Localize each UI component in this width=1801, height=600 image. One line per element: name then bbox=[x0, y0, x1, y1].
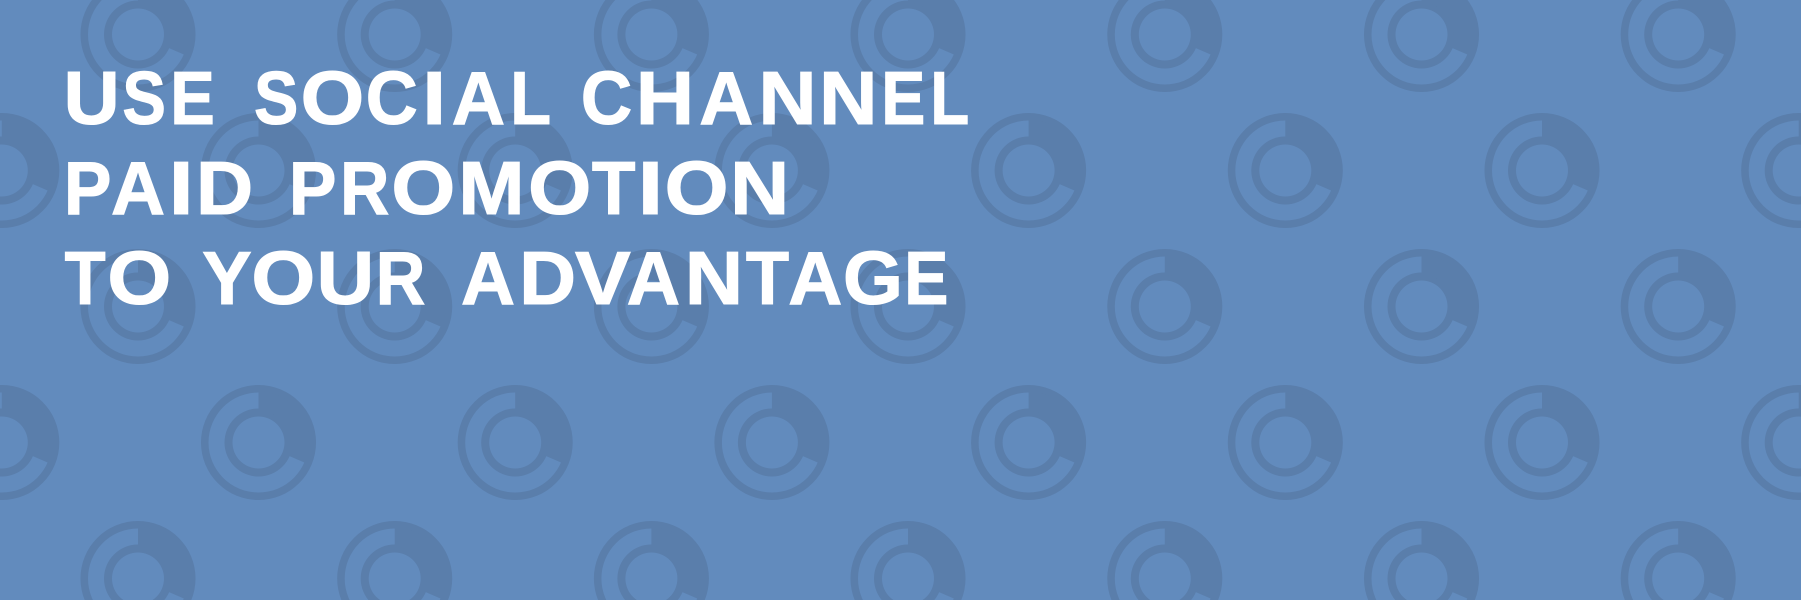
title line 2: D bbox=[196, 146, 253, 230]
title line 1: S bbox=[254, 56, 298, 140]
title line 1: L bbox=[930, 56, 969, 140]
title line 2: O bbox=[528, 146, 591, 230]
title line 2: R bbox=[340, 146, 389, 230]
title line 3: O bbox=[251, 236, 315, 320]
title line 1: A bbox=[699, 56, 753, 140]
title line 3: A bbox=[788, 236, 842, 320]
title line 3: V bbox=[575, 236, 631, 320]
title line 3: G bbox=[843, 236, 903, 320]
title line 3: R bbox=[376, 236, 425, 320]
title line 2: P bbox=[289, 146, 336, 230]
title line 3: A bbox=[461, 236, 515, 320]
title line 1: N bbox=[819, 56, 878, 140]
title line 3: O bbox=[107, 236, 171, 320]
title line 2: M bbox=[458, 146, 524, 230]
title line 1: I bbox=[422, 56, 446, 140]
title line 1: U bbox=[64, 56, 120, 140]
title line 1: A bbox=[452, 56, 505, 140]
title line 1: S bbox=[122, 56, 166, 140]
title line 2: A bbox=[111, 146, 165, 230]
title line 1: C bbox=[366, 56, 418, 140]
title line 1: E bbox=[170, 56, 215, 140]
title line 1: H bbox=[636, 56, 694, 140]
title line 1: N bbox=[758, 56, 816, 140]
title line 3: U bbox=[317, 236, 374, 320]
title line 1: E bbox=[881, 56, 925, 140]
title line 3: Y bbox=[202, 236, 252, 320]
title line 2: I bbox=[638, 146, 663, 230]
title line 3: T bbox=[65, 236, 106, 320]
title line 1: C bbox=[581, 56, 632, 140]
title line 3: E bbox=[904, 236, 948, 320]
title line 2: P bbox=[64, 146, 112, 230]
title bbox=[64, 56, 969, 320]
title line 2: T bbox=[592, 146, 636, 230]
title line 3: T bbox=[746, 236, 789, 320]
title line 2: I bbox=[169, 146, 194, 230]
title line 3: A bbox=[627, 236, 680, 320]
title line 1: L bbox=[510, 56, 550, 140]
title line 3: D bbox=[519, 236, 576, 320]
title line 2: O bbox=[665, 146, 729, 230]
title line 2: N bbox=[730, 146, 789, 230]
title line 1: O bbox=[301, 56, 364, 140]
title line 2: O bbox=[391, 146, 455, 230]
title line 3: N bbox=[685, 236, 743, 320]
